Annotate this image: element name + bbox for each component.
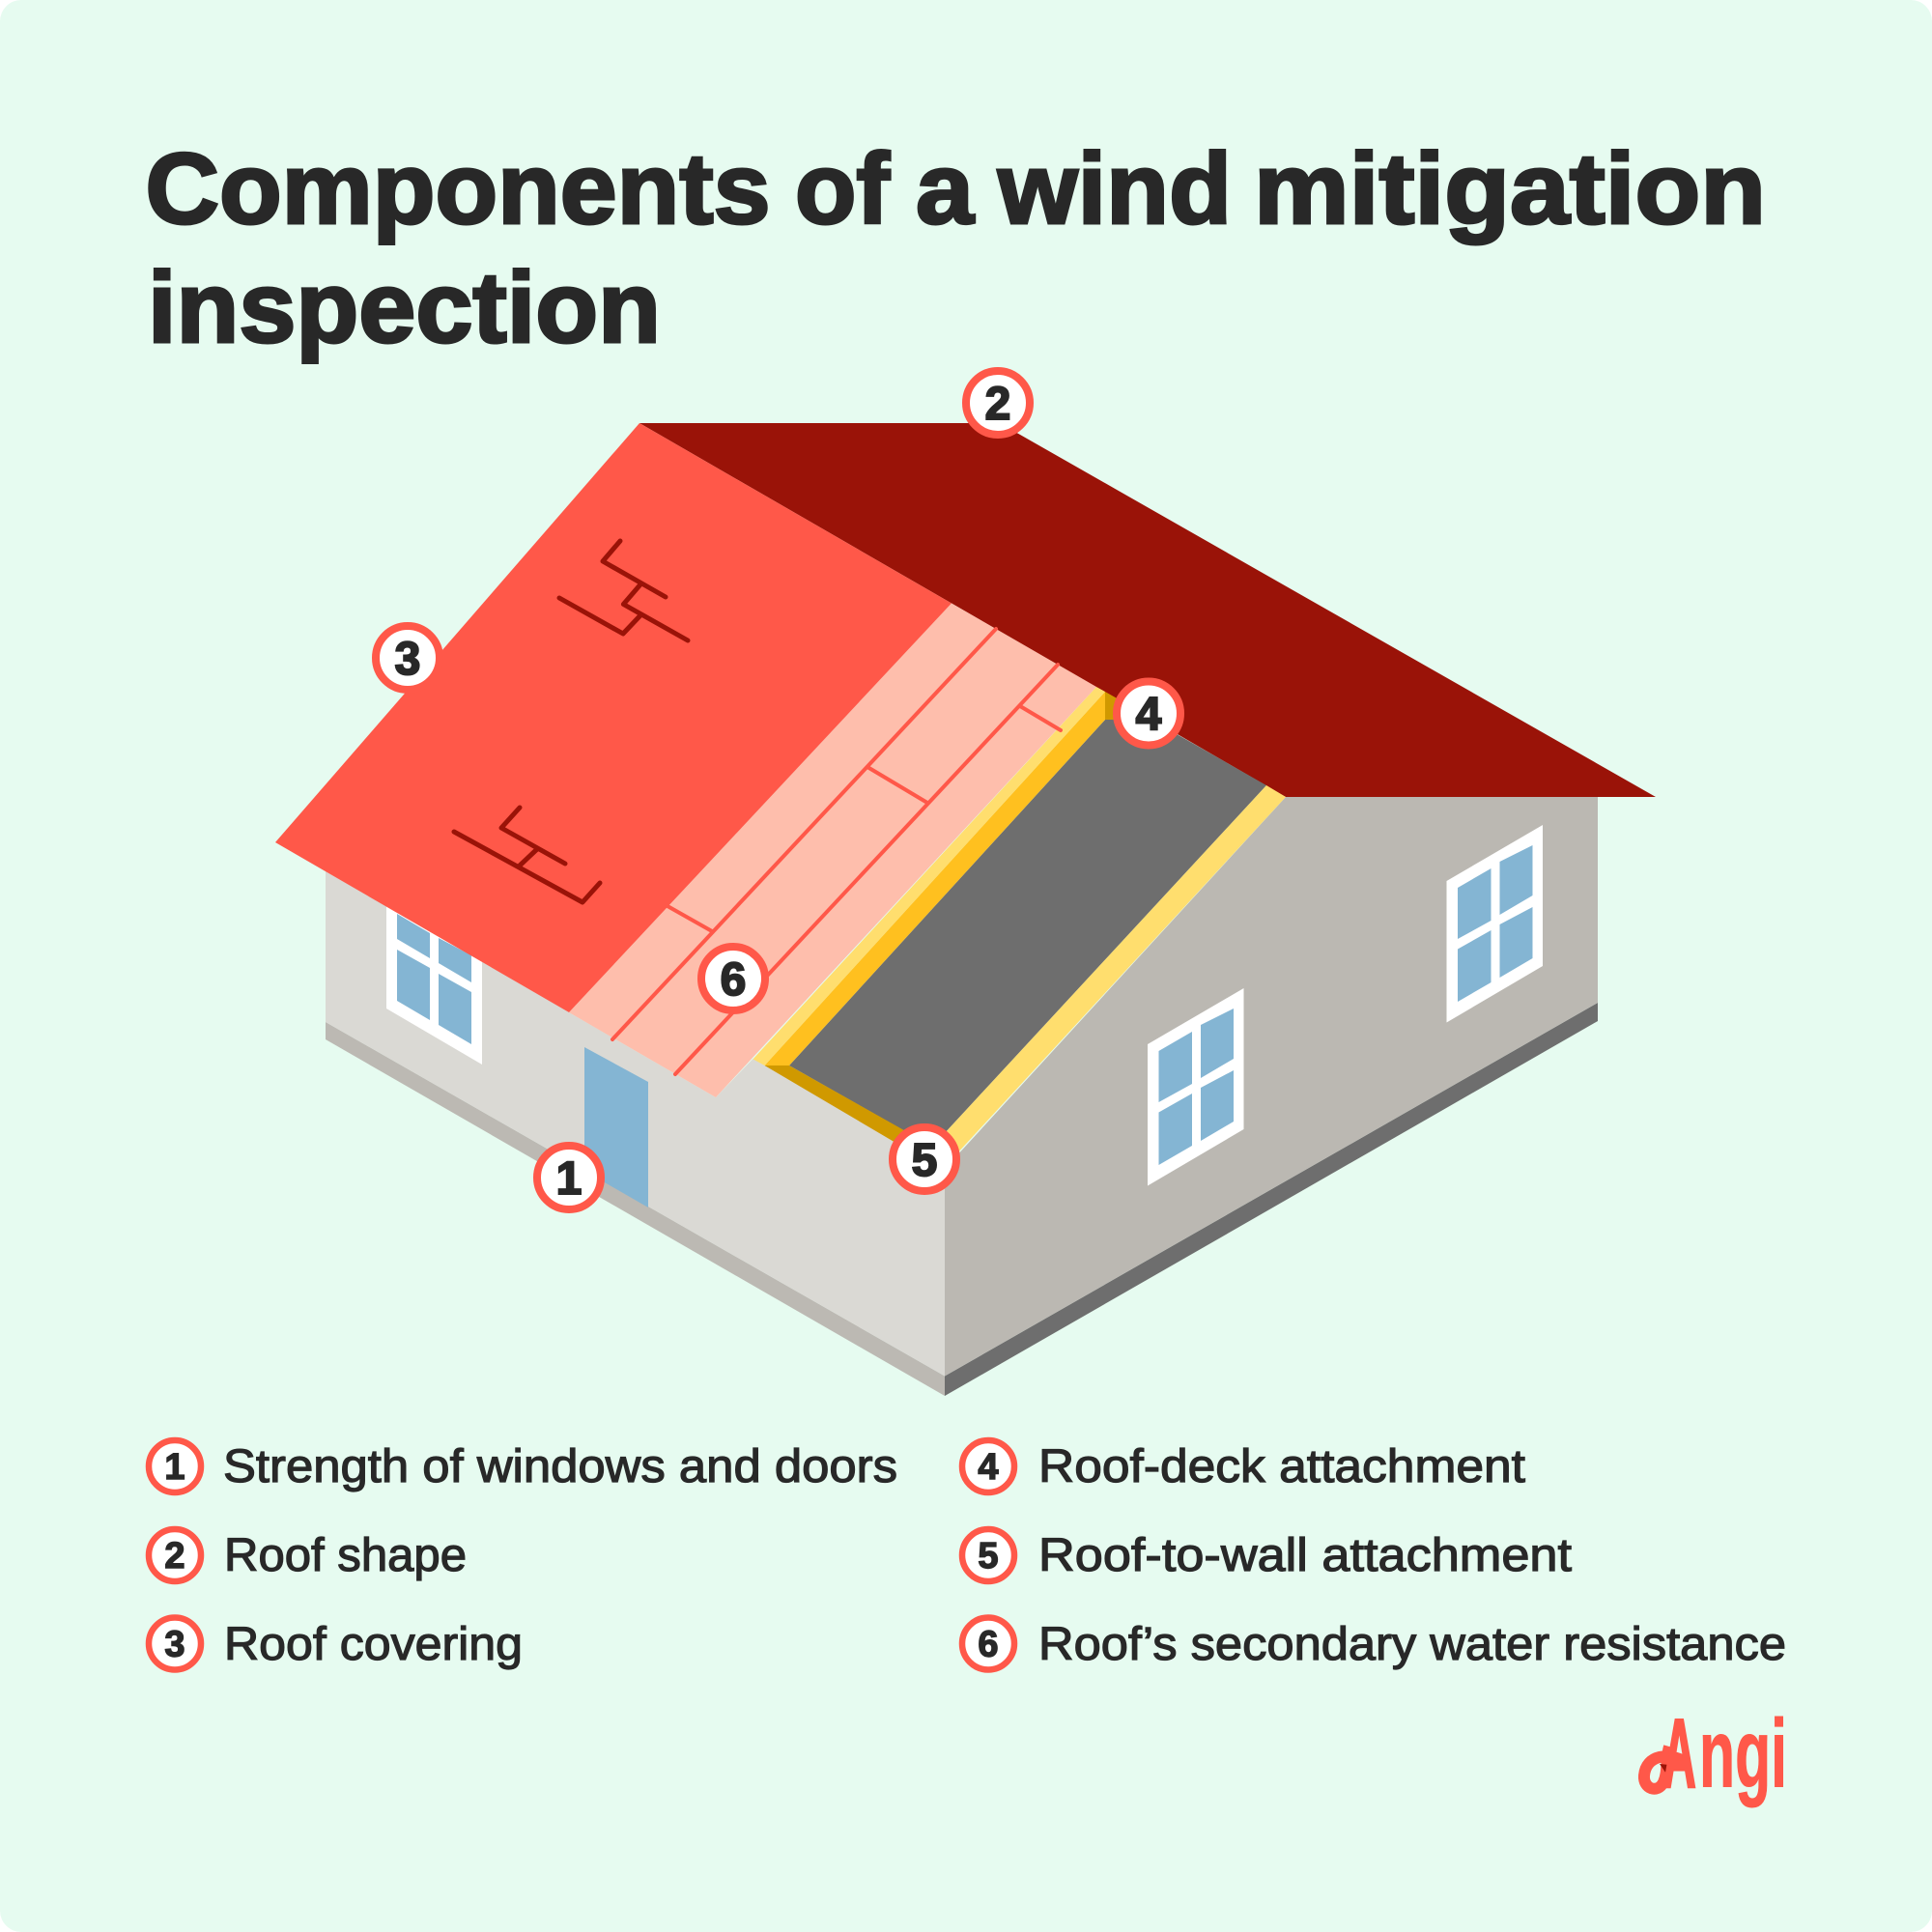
legend item 1: Strength of windows and doors — [223, 1441, 897, 1492]
light yellow strip — [753, 687, 1105, 1065]
title: of — [795, 133, 890, 245]
title: Components — [145, 133, 771, 245]
orange fascia strip — [765, 692, 1105, 1065]
underlayment seams — [612, 629, 1061, 1074]
legend item 3: 3 — [164, 1625, 185, 1665]
shingle marks lower — [454, 808, 600, 902]
left window — [386, 869, 482, 1065]
marker 1 — [537, 1146, 601, 1209]
title — [145, 133, 1766, 364]
red shingled roof covering — [275, 423, 952, 1012]
right yellow roof edge — [932, 785, 1286, 1167]
legend item 3: Roof covering — [224, 1619, 523, 1670]
marker 2: 2 — [985, 379, 1010, 430]
dark gold top truss end — [1105, 692, 1154, 720]
right window upper — [1447, 825, 1543, 1022]
right window lower — [1148, 988, 1244, 1186]
marker 3: 3 — [395, 634, 420, 685]
door — [584, 1047, 648, 1208]
marker 3 — [376, 626, 440, 690]
marker 1: 1 — [556, 1153, 582, 1205]
left wall base — [326, 1022, 945, 1396]
marker 2 — [966, 371, 1030, 435]
house illustration — [275, 423, 1656, 1396]
marker 5 — [893, 1127, 956, 1191]
title: inspection — [148, 252, 661, 364]
legend item 1: 1 — [164, 1447, 185, 1488]
right wall base — [945, 1003, 1598, 1396]
title: mitigation — [1254, 133, 1766, 245]
legend item 4: 4 — [978, 1447, 999, 1488]
shingle marks upper — [559, 541, 688, 640]
marker 5: 5 — [912, 1135, 937, 1186]
marker 6: 6 — [721, 954, 746, 1006]
marker 6 — [701, 947, 765, 1010]
dark gold truss ends — [765, 1065, 933, 1156]
legend item 5: 5 — [978, 1536, 999, 1577]
legend item 6: 6 — [978, 1625, 999, 1665]
marker 4 — [1117, 682, 1180, 746]
title: a — [916, 133, 975, 245]
title: wind — [997, 133, 1232, 245]
right wall — [945, 797, 1598, 1376]
Angi logo: ngi — [1699, 1700, 1787, 1808]
left wall — [326, 871, 945, 1376]
legend item 2: Roof shape — [224, 1530, 467, 1581]
legend item 4: Roof-deck attachment — [1038, 1441, 1525, 1492]
Angi logo — [1644, 1699, 1787, 1808]
legend item 5: Roof-to-wall attachment — [1038, 1530, 1572, 1581]
secondary water barrier — [569, 603, 1096, 1097]
exposed roof deck — [789, 699, 1266, 1147]
legend item 2: 2 — [164, 1536, 185, 1577]
marker 4: 4 — [1136, 690, 1162, 740]
legend item 6: Roof’s secondary water resistance — [1038, 1619, 1786, 1670]
Angi logo: A — [1662, 1699, 1696, 1807]
dark rear roof slope — [639, 423, 1656, 797]
